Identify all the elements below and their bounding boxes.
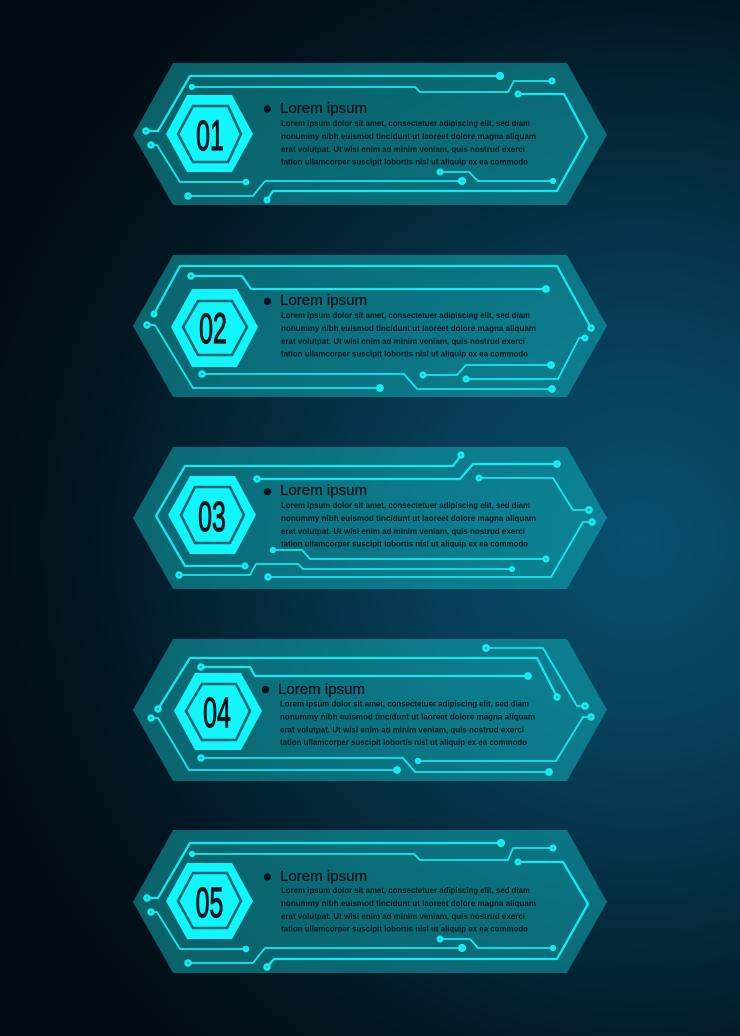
panel 02 — [133, 255, 607, 397]
panel 01 — [133, 63, 607, 205]
hexagon badge 03: 03 — [198, 493, 226, 541]
circuit lines 03 — [156, 453, 594, 579]
panel 04 — [133, 639, 607, 781]
hexagon badge 02: 02 — [199, 305, 227, 353]
text block 01: Lorem ipsum — [280, 100, 367, 117]
hexagon badge 05 — [166, 863, 253, 939]
text block 04: tation ullamcorper suscipit lobortis nisl ut aliquip ex ea commodo — [280, 738, 527, 747]
text block 04: nonummy nibh euismod tincidunt ut laoreet dolore magna aliquam — [280, 712, 535, 722]
text block 04: Lorem ipsum dolor sit amet, consectetuer adipiscing elit, sed diam — [280, 700, 529, 708]
text block 03: Lorem ipsum — [280, 482, 367, 499]
text block 05: Lorem ipsum dolor sit amet, consectetuer adipiscing elit, sed diam — [281, 886, 530, 895]
text block 01: erat volutpat. Ut wisi enim ad minim veniam, quis nostrud exerci — [281, 145, 525, 154]
text block 05: tation ullamcorper suscipit lobortis nisl ut aliquip ex ea commodo — [281, 924, 528, 934]
text block 02: tation ullamcorper suscipit lobortis nisl ut aliquip ex ea commodo — [281, 350, 528, 358]
hexagon badge 05: 05 — [196, 879, 223, 927]
hexagon badge 03 — [168, 476, 256, 554]
text block 02: Lorem ipsum — [280, 292, 367, 309]
text block 03: tation ullamcorper suscipit lobortis nisl ut aliquip ex ea commodo — [281, 540, 528, 548]
text block 03: erat volutpat. Ut wisi enim ad minim veniam, quis nostrud exerci — [281, 527, 525, 536]
circuit lines 04 — [149, 645, 593, 774]
text block 02: nonummy nibh euismod tincidunt ut laoreet dolore magna aliquam — [281, 324, 536, 333]
text block 05 — [264, 868, 536, 934]
text block 03: nonummy nibh euismod tincidunt ut laoreet dolore magna aliquam — [281, 514, 536, 523]
text block 02: erat volutpat. Ut wisi enim ad minim veniam, quis nostrud exerci — [281, 337, 525, 346]
hexagon badge 04: 04 — [203, 689, 231, 737]
text block 01: tation ullamcorper suscipit lobortis nisl ut aliquip ex ea commodo — [281, 158, 528, 166]
text block 01: nonummy nibh euismod tincidunt ut laoreet dolore magna aliquam — [281, 132, 536, 141]
circuit lines 01 — [144, 74, 587, 202]
text block 01: Lorem ipsum dolor sit amet, consectetuer adipiscing elit, sed diam — [281, 119, 530, 128]
panel 05 — [133, 830, 607, 973]
hexagon badge 01 — [166, 95, 253, 172]
hexagon badge 01: 01 — [196, 112, 224, 160]
text block 01 — [264, 100, 536, 166]
text block 04: erat volutpat. Ut wisi enim ad minim veniam, quis nostrud exerci — [280, 726, 524, 734]
panel 03 — [133, 447, 607, 589]
text block 05: nonummy nibh euismod tincidunt ut laoreet dolore magna aliquam — [281, 899, 536, 908]
text block 04: Lorem ipsum — [278, 681, 365, 698]
text block 05: erat volutpat. Ut wisi enim ad minim veniam, quis nostrud exerci — [281, 912, 525, 921]
text block 05: Lorem ipsum — [280, 868, 367, 885]
hexagon badge 04 — [174, 673, 262, 750]
hexagon badge 02 — [171, 289, 258, 367]
circuit lines 05 — [144, 840, 588, 969]
text block 02 — [264, 292, 536, 358]
text block 04 — [262, 681, 535, 747]
text block 03: Lorem ipsum dolor sit amet, consectetuer adipiscing elit, sed diam — [281, 501, 530, 510]
text block 02: Lorem ipsum dolor sit amet, consectetuer adipiscing elit, sed diam — [281, 311, 530, 320]
circuit lines 02 — [144, 266, 593, 391]
text block 03 — [264, 482, 536, 548]
